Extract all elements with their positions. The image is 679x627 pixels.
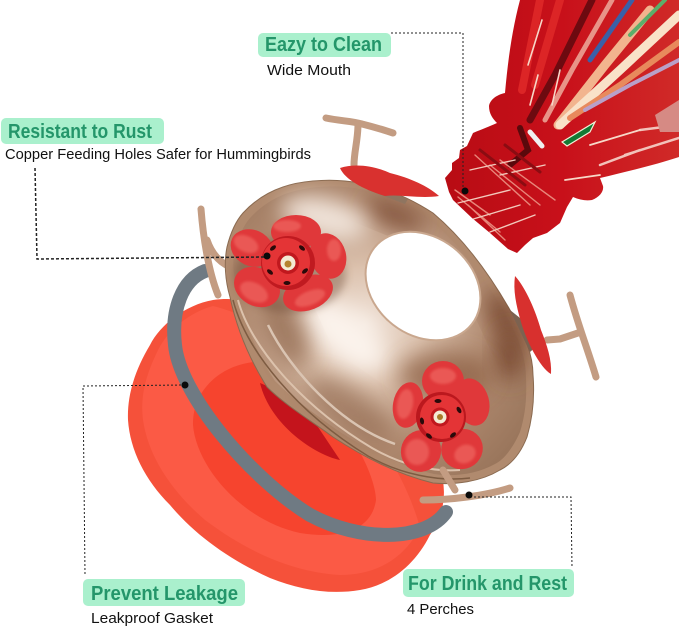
right side flower bbox=[510, 276, 551, 374]
anchor dot bbox=[462, 188, 468, 194]
front-left flower with feeding port bbox=[224, 215, 351, 319]
label description: 4 Perches bbox=[407, 601, 474, 618]
bowl central well bbox=[193, 362, 376, 535]
bottle neck bbox=[445, 0, 679, 253]
leader line bbox=[83, 385, 185, 575]
right perch bbox=[547, 295, 596, 377]
label heading: For Drink and Rest bbox=[408, 573, 567, 595]
copper lid bbox=[225, 180, 534, 484]
port hub bbox=[416, 392, 466, 442]
left perch bbox=[201, 209, 255, 295]
label heading: Prevent Leakage bbox=[91, 583, 238, 605]
label heading: Resistant to Rust bbox=[8, 121, 152, 143]
port hub bbox=[261, 236, 315, 290]
label description: Wide Mouth bbox=[267, 62, 351, 79]
bowl outer shell bbox=[128, 299, 444, 592]
label pill bbox=[403, 569, 574, 597]
shadow bbox=[234, 237, 346, 313]
label pill bbox=[1, 118, 164, 144]
anchor dot bbox=[466, 492, 472, 498]
lid dome bbox=[233, 186, 526, 475]
anchor dot bbox=[264, 252, 270, 260]
front-bottom flower with feeding port bbox=[389, 361, 495, 478]
leakproof gasket bbox=[174, 271, 446, 535]
feed holes bbox=[419, 399, 462, 440]
petals bbox=[224, 215, 351, 319]
leader line bbox=[35, 168, 266, 259]
feed holes bbox=[266, 244, 309, 285]
lid centre opening bbox=[344, 209, 502, 363]
label description: Leakproof Gasket bbox=[91, 610, 214, 627]
label heading: Eazy to Clean bbox=[265, 34, 382, 56]
callout: resistant to rust bbox=[1, 118, 311, 260]
petals bbox=[389, 361, 495, 478]
label pill bbox=[258, 33, 391, 57]
callout: easy to clean bbox=[258, 33, 468, 194]
leader line bbox=[470, 497, 572, 568]
label pill bbox=[83, 579, 245, 606]
anchor dot bbox=[182, 382, 188, 388]
callout: prevent leakage bbox=[83, 382, 245, 627]
petal highlights bbox=[395, 368, 479, 467]
top perch bbox=[326, 118, 393, 165]
petal highlights bbox=[231, 220, 341, 310]
leader line bbox=[391, 33, 463, 190]
lid shading bbox=[233, 187, 530, 479]
red nectar base bowl bbox=[128, 299, 444, 592]
lid rim bbox=[225, 180, 534, 484]
callout: drink and rest bbox=[403, 492, 574, 618]
top back flower bbox=[340, 166, 439, 204]
bottom perch bbox=[423, 470, 510, 500]
inner red tube bbox=[260, 383, 340, 460]
bowl inner basin bbox=[142, 306, 420, 575]
label description: Copper Feeding Holes Safer for Hummingbirds bbox=[5, 146, 311, 163]
